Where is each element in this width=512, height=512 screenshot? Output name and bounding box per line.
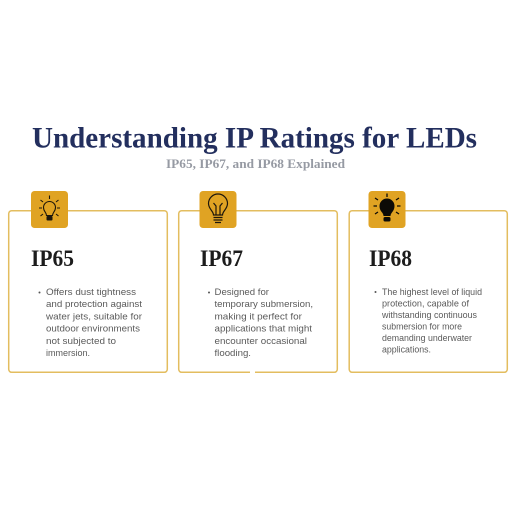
icon: light bulb with rays, solid <box>368 191 406 228</box>
bullet text: IP67: flooding. <box>214 348 251 358</box>
bullet text: IP68: withstanding continuous <box>381 310 477 320</box>
card outline: IP67 <box>179 211 337 372</box>
bullet text: IP67: encounter occasional <box>214 336 307 346</box>
panel: IP65 <box>9 191 167 372</box>
subtitle: IP65, IP67, and IP68 Explained <box>166 156 346 171</box>
bullet text: IP65: immersion. <box>46 348 90 358</box>
bullet text: IP68 <box>374 287 482 354</box>
bullet text: IP68: applications. <box>382 344 431 354</box>
bullet text: IP65 <box>38 287 142 358</box>
small notch in card bottom edge <box>250 370 255 374</box>
bullet text: IP68: submersion for more <box>382 322 462 332</box>
bullet text: IP67: making it perfect for <box>214 312 302 322</box>
heading: IP67: IP67 <box>200 246 243 271</box>
panel: IP68 <box>349 191 507 372</box>
bullet text: IP67: temporary submersion, <box>214 299 313 309</box>
bullet text: IP67: Designed for <box>214 287 269 297</box>
panel: IP67 <box>179 191 337 374</box>
bullet text: IP67 <box>208 287 313 358</box>
title: Understanding IP Ratings for LEDs <box>32 122 477 154</box>
card outline: IP68 <box>349 211 507 372</box>
bullet text: IP68: The highest level of liquid <box>382 287 482 297</box>
bullet text: IP67: applications that might <box>214 324 312 334</box>
bullet text: IP65: outdoor environments <box>46 324 140 334</box>
icon: light bulb with rays, outline <box>31 191 68 228</box>
bullet text: IP65: water jets, suitable for <box>45 312 142 322</box>
heading: IP68: IP68 <box>369 246 412 271</box>
icon: light bulb with filament, outline <box>200 191 236 228</box>
heading: IP65: IP65 <box>31 246 74 271</box>
card outline: IP65 <box>9 211 167 372</box>
bullet text: IP65: and protection against <box>46 299 142 309</box>
bullet text: IP65: Offers dust tightness <box>46 287 136 297</box>
bullet text: IP68: protection, capable of <box>382 298 469 308</box>
bullet text: IP68: demanding underwater <box>382 333 472 343</box>
bullet text: IP65: not subjected to <box>46 336 116 346</box>
